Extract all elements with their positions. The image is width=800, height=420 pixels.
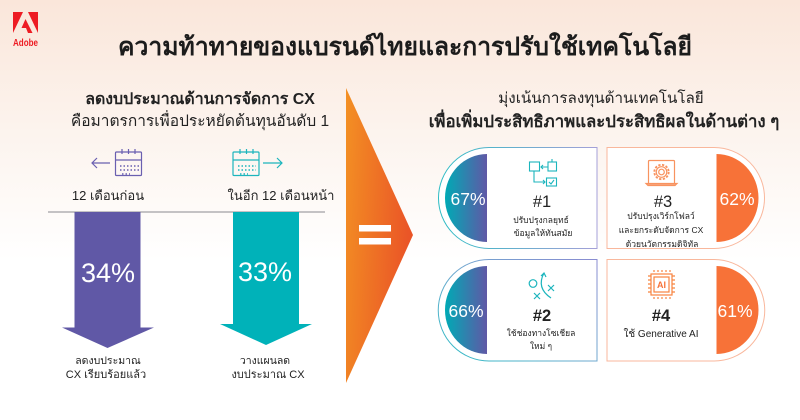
arrow: 33%: 33% (238, 257, 292, 287)
description #1 (513, 215, 572, 239)
description #2: ใหม่ ๆ (530, 341, 552, 351)
caption: 34%: ลดงบประมาณ (75, 355, 141, 367)
percent 61%: 61% (717, 301, 753, 321)
percent 66% (445, 266, 487, 354)
description #4: ใช้ Generative AI (623, 328, 699, 340)
arrow: 34%: 34% (81, 258, 135, 288)
big orange arrow with equals sign (346, 88, 413, 383)
title: ความท้าทายของแบรนด์ไทยและการปรับใช้เทคโนโลยี (118, 32, 692, 61)
percent 67% (445, 154, 487, 242)
caption: 33%: งบประมาณ CX (231, 369, 305, 381)
description #3: ด้วยนวัตกรรมดิจิทัล (626, 239, 698, 249)
icon: AI chip (648, 270, 675, 299)
rank #1: #1 (533, 193, 551, 211)
rank #4: #4 (652, 307, 671, 325)
arrow: 33% (220, 212, 312, 345)
description #3: ปรับปรุงเวิร์กโฟลว์ (627, 211, 695, 222)
description #3: และยกระดับจัดการ CX (619, 225, 704, 235)
icon: calendar future (233, 149, 282, 176)
heading: right panel (429, 89, 779, 131)
rank #2: #2 (533, 307, 551, 325)
icon: calendar past (92, 149, 142, 176)
caption: 33% (231, 355, 305, 381)
caption: 34% (66, 355, 146, 381)
heading: left panel: ลดงบประมาณด้านการจัดการ CX (85, 90, 315, 108)
label: next 12 months: ในอีก 12 เดือนหน้า (228, 188, 334, 203)
caption: 33%: วางแผนลด (240, 355, 290, 367)
heading: right panel: เพื่อเพิ่มประสิทธิภาพและประสิทธิผลในด้านต่าง ๆ (429, 109, 779, 131)
percent 67%: 67% (450, 189, 486, 209)
card: #2 (438, 260, 597, 361)
arrow: 34% (62, 212, 154, 348)
label: 12 months ago: 12 เดือนก่อน (72, 188, 144, 203)
heading: left panel (71, 90, 329, 131)
icon: strategy play (529, 273, 554, 299)
description #2 (507, 328, 575, 351)
percent 61% (716, 266, 758, 354)
caption: 34%: CX เรียบร้อยแล้ว (66, 368, 146, 381)
divider (48, 212, 325, 213)
description #1: ข้อมูลให้ทันสมัย (514, 228, 572, 239)
icon: laptop gear (646, 160, 677, 186)
card: #3 (607, 148, 764, 249)
description #1: ปรับปรุงกลยุทธ์ (513, 215, 569, 226)
icon: workflow (530, 159, 556, 186)
heading: right panel: มุ่งเน้นการลงทุนด้านเทคโนโลยี (498, 89, 704, 108)
percent 62%: 62% (719, 189, 755, 209)
icon: AI chip: AI (657, 280, 666, 290)
percent 62% (716, 154, 758, 242)
card: #4 (607, 260, 765, 361)
logo: Adobe: Adobe (13, 38, 38, 49)
rank #3: #3 (654, 193, 672, 211)
description #3 (619, 211, 704, 249)
heading: left panel: คือมาตรการเพื่อประหยัดต้นทุนอันดับ 1 (71, 110, 329, 131)
logo: Adobe (13, 12, 38, 49)
description #2: ใช้ช่องทางโซเชียล (507, 328, 575, 338)
percent 66%: 66% (448, 301, 484, 321)
card: #1 (438, 148, 597, 248)
